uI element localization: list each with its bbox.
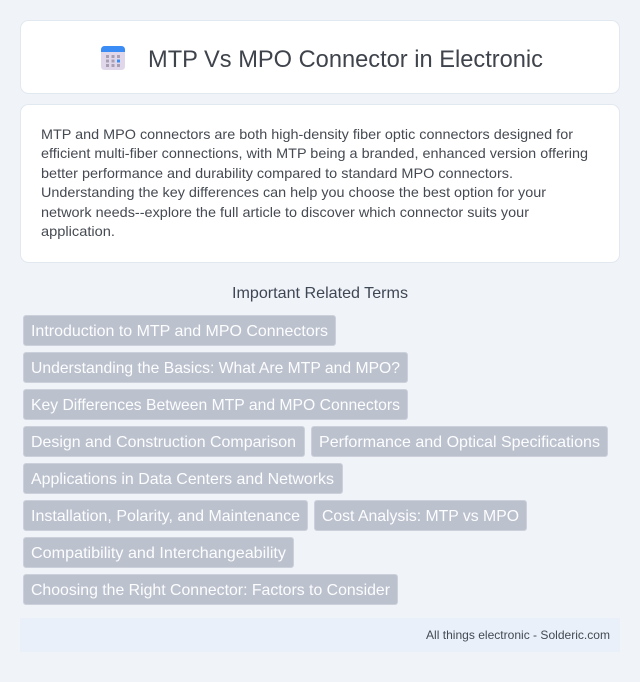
panel: header — [20, 20, 620, 94]
tag: key differences: Key Differences Between MTP and MPO Connectors — [31, 397, 400, 414]
heading: related terms: Important Related Terms — [232, 285, 408, 302]
tag: key differences — [24, 390, 408, 420]
panel: related terms tags — [24, 316, 608, 604]
tag: performance — [312, 426, 608, 456]
text block: introduction paragraph: efficient multi-fiber connections, with MTP being a branded, enhanced version offering — [41, 145, 588, 161]
tag: compatibility — [24, 538, 294, 568]
tag: cost: Cost Analysis: MTP vs MPO — [322, 508, 519, 525]
tag: installation: Installation, Polarity, and Maintenance — [31, 508, 300, 525]
tag: choosing: Choosing the Right Connector: Factors to Consider — [31, 582, 391, 599]
text block: introduction paragraph: network needs--explore the full article to discover which connector suits your — [41, 204, 529, 220]
footer — [20, 618, 620, 652]
text block: introduction paragraph: Understanding the key differences can help you choose the best option for your — [41, 184, 546, 200]
icon: calendar grid — [101, 46, 125, 70]
text block: introduction paragraph — [41, 126, 588, 239]
panel: introduction — [20, 104, 620, 262]
tag: compatibility: Compatibility and Interchangeability — [31, 545, 286, 562]
tag: applications: Applications in Data Centers and Networks — [31, 471, 334, 488]
text block: introduction paragraph: better performance and durability compared to standard MPO connectors. — [41, 165, 513, 181]
tag: cost — [314, 500, 526, 530]
text block: introduction paragraph: application. — [41, 223, 115, 239]
tag: basics: Understanding the Basics: What Are MTP and MPO? — [31, 360, 400, 377]
tag: installation — [24, 500, 308, 530]
tag: basics — [24, 352, 408, 382]
tag: introduction — [24, 316, 336, 346]
tag: choosing — [24, 574, 398, 604]
tag: performance: Performance and Optical Specifications — [319, 434, 600, 451]
tag: design — [24, 426, 304, 456]
text block: introduction paragraph: MTP and MPO connectors are both high-density fiber optic connectors designed for — [41, 126, 573, 142]
title: MTP Vs MPO Connector in Electronic — [148, 46, 543, 73]
tag: introduction: Introduction to MTP and MPO Connectors — [31, 323, 328, 340]
footer: All things electronic - Solderic.com — [426, 628, 610, 642]
tag: applications — [24, 464, 342, 494]
tag: design: Design and Construction Comparison — [31, 434, 296, 451]
